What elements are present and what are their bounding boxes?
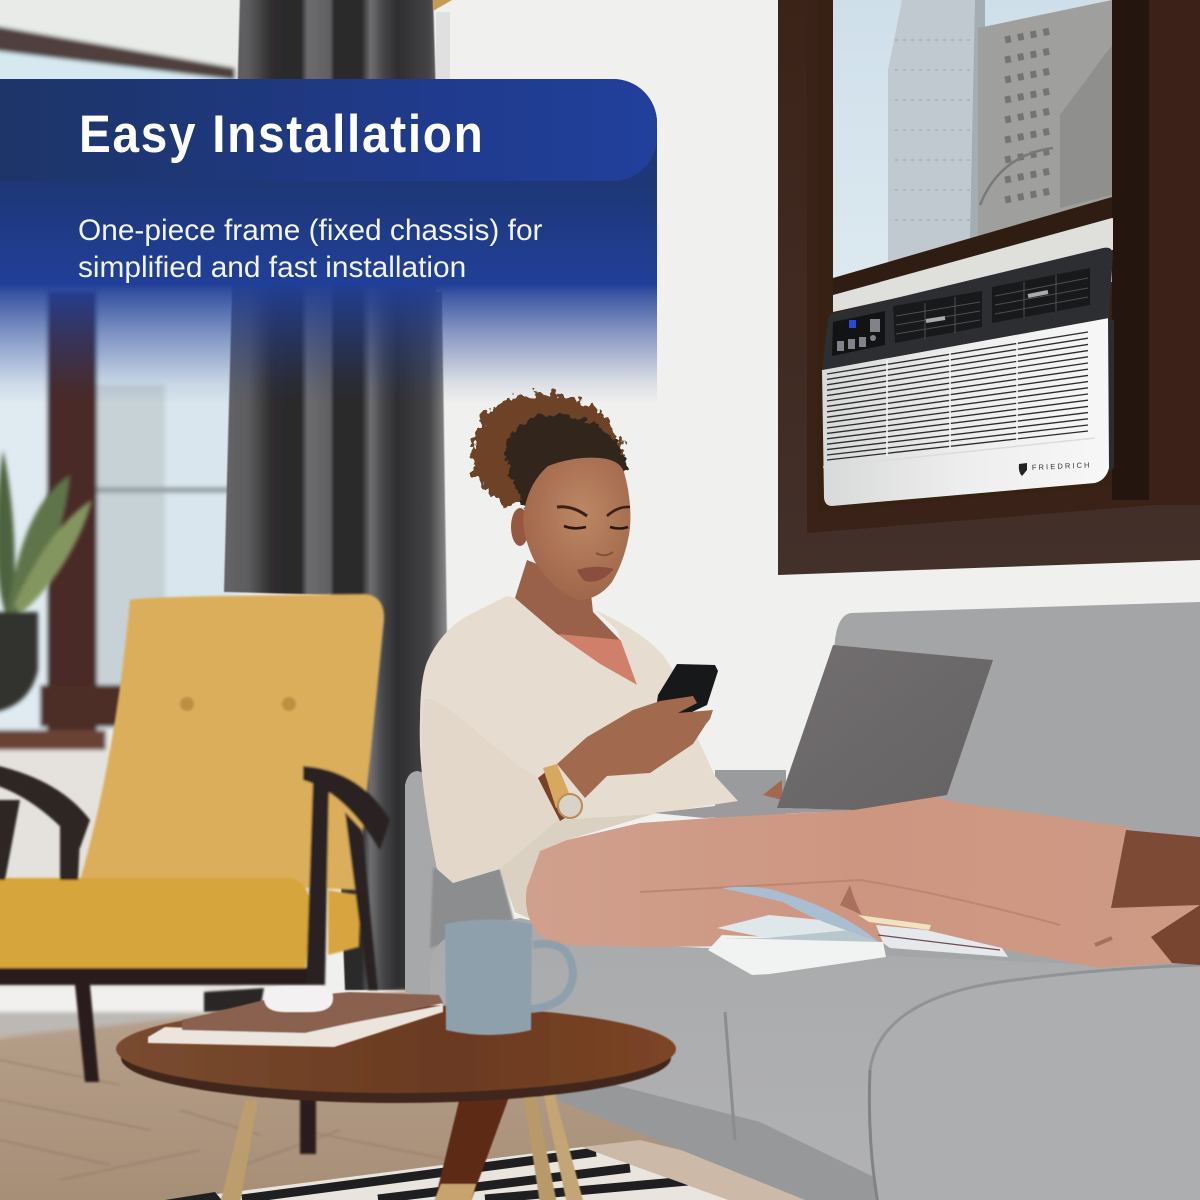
watch xyxy=(538,764,582,821)
curtain xyxy=(224,0,447,990)
AC brand label: FRIEDRICH xyxy=(1032,460,1092,472)
left window xyxy=(0,0,242,1040)
description: One-piece frame (fixed chassis) for xyxy=(78,214,543,247)
plant xyxy=(0,450,92,712)
laptop xyxy=(654,645,993,818)
cardigan hem shadow xyxy=(500,814,653,919)
leg xyxy=(1111,830,1200,908)
description xyxy=(78,214,543,284)
description: simplified and fast installation xyxy=(78,251,466,284)
books and earbuds case xyxy=(148,986,443,1047)
face xyxy=(523,458,630,600)
window trim xyxy=(433,0,452,11)
woman xyxy=(420,393,1200,968)
heading bar xyxy=(0,79,657,181)
title: Easy Installation xyxy=(79,105,485,164)
hand xyxy=(557,696,713,798)
floor xyxy=(0,990,900,1200)
blue text panel xyxy=(0,79,657,404)
top xyxy=(557,634,637,685)
AC unit xyxy=(822,248,1114,506)
lower foot xyxy=(1151,905,1200,965)
hair xyxy=(472,393,627,512)
sleeve xyxy=(422,699,558,883)
mug xyxy=(445,920,573,1035)
facial features xyxy=(557,507,630,582)
cardigan xyxy=(420,596,738,919)
phone xyxy=(653,664,718,730)
skirt xyxy=(526,790,1200,968)
herringbone floor lines xyxy=(0,1060,450,1180)
AC window frame xyxy=(778,0,1200,575)
rug xyxy=(140,1140,900,1200)
ear xyxy=(511,508,529,546)
sofa xyxy=(405,602,1200,1200)
skirt folds xyxy=(640,880,1060,925)
neck and chest xyxy=(515,560,620,640)
open book xyxy=(708,887,1008,975)
armchair xyxy=(0,594,390,1154)
coffee table xyxy=(116,1005,676,1200)
